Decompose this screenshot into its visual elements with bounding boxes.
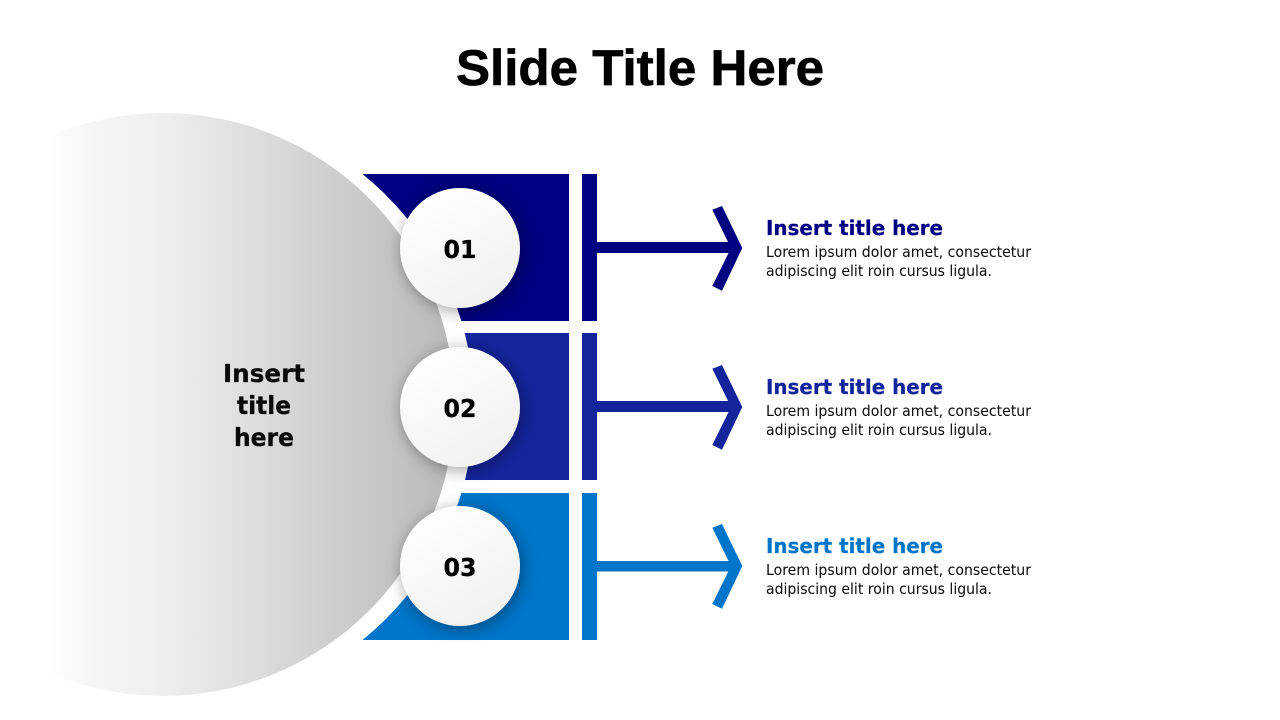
semicircle label xyxy=(223,359,305,452)
semicircle label: title xyxy=(237,391,291,420)
number badge 03 xyxy=(400,506,520,626)
row 3 arrow xyxy=(582,493,742,640)
text block 2: Insert title here xyxy=(766,375,943,399)
number badge 01 xyxy=(400,188,520,308)
block 2 xyxy=(363,333,569,480)
white gap ring xyxy=(0,108,474,706)
text block 2: adipiscing elit roin cursus ligula. xyxy=(766,421,992,439)
number badge 01: 01 xyxy=(444,235,476,264)
text block 1: Lorem ipsum dolor amet, consectetur xyxy=(766,243,1032,261)
panel: blue blocks xyxy=(363,174,569,640)
text block 1 xyxy=(766,216,1032,280)
semicircle label: here xyxy=(234,423,294,452)
semicircle label: Insert xyxy=(223,359,305,388)
number badge 03: 03 xyxy=(444,553,476,582)
row 1 arrow xyxy=(582,174,742,321)
large gray semicircle xyxy=(0,113,454,696)
title: Slide Title Here xyxy=(456,40,824,96)
text block 1: Insert title here xyxy=(766,216,943,240)
text block 3 xyxy=(766,534,1032,598)
text block 3: Lorem ipsum dolor amet, consectetur xyxy=(766,561,1032,579)
number badge 02 xyxy=(400,347,520,467)
text block 1: adipiscing elit roin cursus ligula. xyxy=(766,262,992,280)
text block 2: Lorem ipsum dolor amet, consectetur xyxy=(766,402,1032,420)
block 3 xyxy=(363,493,569,640)
text block 2 xyxy=(766,375,1032,439)
block 1 xyxy=(363,174,569,321)
row 2 arrow xyxy=(582,333,742,480)
number badge 02: 02 xyxy=(444,394,476,423)
text block 3: adipiscing elit roin cursus ligula. xyxy=(766,580,992,598)
text block 3: Insert title here xyxy=(766,534,943,558)
